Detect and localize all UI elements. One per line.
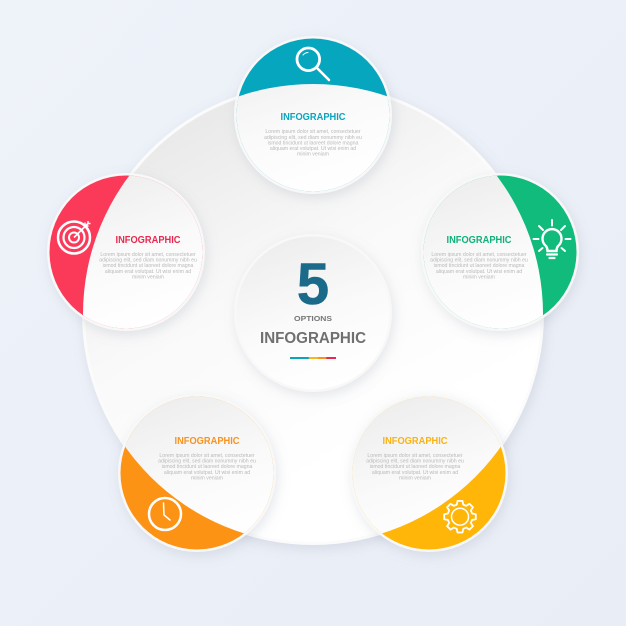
icon: magnifier (297, 48, 329, 80)
body text: Lorem ipsum dolor sit amet, consectetuer (100, 252, 196, 258)
colored underline (290, 357, 336, 359)
body text: ismod tincidunt ut laoreet dolore magna (370, 464, 461, 470)
panel: center circle (234, 234, 392, 392)
panel: bottom-left option (118, 394, 276, 552)
body text: adipiscing elit, sed diam nonummy nibh eu (430, 258, 528, 264)
body text: minim veniam (191, 476, 223, 482)
heading: INFOGRAPHIC (116, 235, 180, 246)
center title: INFOGRAPHIC (260, 330, 366, 347)
large background circle (82, 83, 544, 545)
heading: INFOGRAPHIC (382, 436, 448, 447)
body text: adipiscing elit, sed diam nonummy nibh eu (366, 458, 464, 464)
panel: left option (47, 173, 205, 331)
icon: clock (149, 498, 181, 530)
body text: ismod tincidunt ut laoreet dolore magna (162, 464, 253, 470)
panel: bottom-right option (350, 394, 508, 552)
body text: minim veniam (463, 274, 495, 280)
heading: INFOGRAPHIC (280, 112, 346, 123)
big number: 5 (297, 252, 329, 317)
body text (366, 453, 464, 482)
body text: minim veniam (399, 476, 431, 482)
icon: gear (444, 501, 476, 532)
body text (99, 252, 197, 280)
body text: aliquam erat volutpat. Ut wisi enim ad (372, 470, 458, 476)
body text: aliquam erat volutpat. Ut wisi enim ad (164, 470, 250, 476)
panel: right option (421, 173, 579, 331)
body text: Lorem ipsum dolor sit amet, consectetuer (431, 252, 527, 258)
heading: INFOGRAPHIC (446, 235, 512, 246)
body text: minim veniam (132, 274, 164, 280)
body text: adipiscing elit, sed diam nonummy nibh eu (99, 258, 197, 264)
body text (158, 453, 256, 482)
body text: Lorem ipsum dolor sit amet, consectetuer (159, 453, 255, 459)
options label: OPTIONS (294, 314, 332, 323)
body text: adipiscing elit, sed diam nonummy nibh eu (158, 458, 256, 464)
body text: Lorem ipsum dolor sit amet, consectetuer (265, 129, 361, 135)
body text: adipiscing elit, sed diam nonummy nibh eu (264, 135, 362, 141)
heading: INFOGRAPHIC (174, 436, 240, 447)
body text: ismod tincidunt ut laoreet dolore magna (103, 263, 194, 269)
body text (264, 129, 362, 158)
icon: light bulb (534, 220, 570, 258)
body text: ismod tincidunt ut laoreet dolore magna (434, 263, 525, 269)
body text: aliquam erat volutpat. Ut wisi enim ad (436, 269, 522, 275)
body text: minim veniam (297, 152, 329, 158)
body text: aliquam erat volutpat. Ut wisi enim ad (105, 269, 191, 275)
panel: top option (234, 36, 392, 194)
body text: ismod tincidunt ut laoreet dolore magna (268, 140, 359, 146)
body text: aliquam erat volutpat. Ut wisi enim ad (270, 146, 356, 152)
body text (430, 252, 528, 280)
icon: target (58, 221, 90, 254)
body text: Lorem ipsum dolor sit amet, consectetuer (367, 453, 463, 459)
